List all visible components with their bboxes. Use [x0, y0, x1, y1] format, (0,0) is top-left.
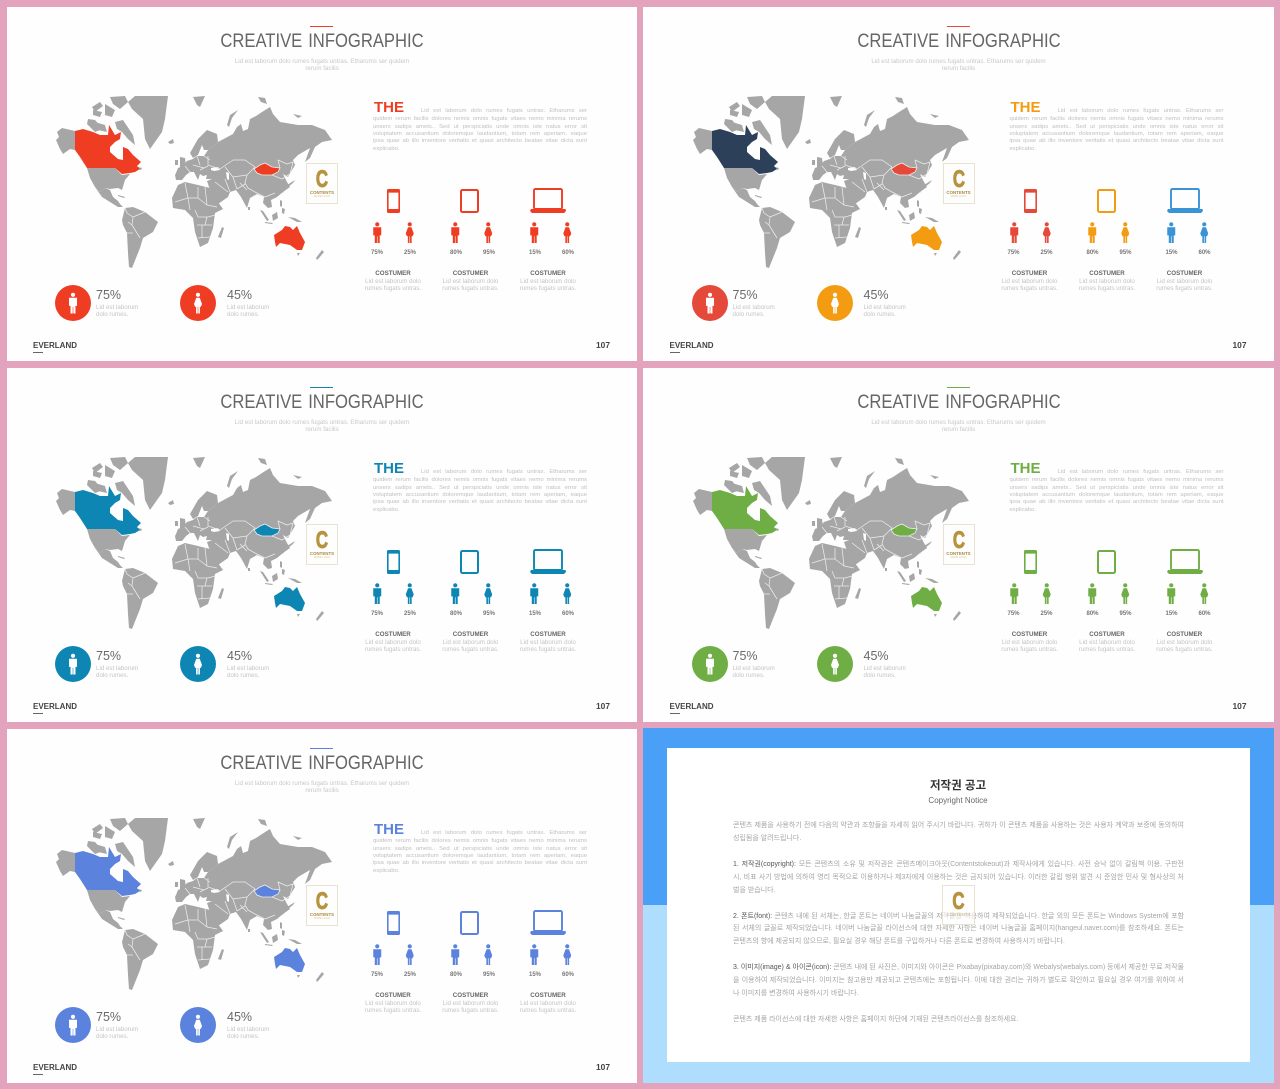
stat: female 45%: [0, 721, 1, 723]
panel: green slide: 80%: [1086, 611, 1098, 617]
device icons: [0, 722, 640, 1083]
accent bar: [310, 386, 333, 388]
panel: teal slide: explicabo.: [373, 506, 400, 512]
percent labels: [371, 250, 574, 256]
panel: red slide: unsers sadips amets.. Sed ut perspiciatis unde omnis iste natus error sit: [373, 124, 587, 130]
subtitle: [172, 780, 472, 794]
panel: multicolor slide: 95%: [1119, 250, 1132, 256]
panel: red slide: COSTUMER: [530, 270, 566, 277]
percent labels: [1007, 610, 1210, 617]
device icons: [387, 188, 566, 213]
panel: red slide: rumes fugats untras.: [365, 285, 421, 292]
gender icons: [373, 583, 572, 604]
panel: green slide: 25%: [1040, 611, 1052, 617]
world map: [693, 96, 969, 268]
panel: blue slide: dolo rumes.: [227, 1033, 259, 1040]
panel: copyright notice: 3. 이미지(image) & 아이콘(icon): 콘텐츠 내에 된 사진은, 이미지와 아이콘은 Pixabay(pixabay.com)와 Webalys(webalys.com) 등에서 제공한 무료 저작물: [733, 964, 1184, 971]
panel: blue slide: explicabo.: [373, 868, 400, 874]
panel: multicolor slide: Lid est laborum dolo: [1157, 278, 1212, 285]
costumer captions: [365, 631, 576, 653]
world map: [0, 722, 360, 1087]
gender icons: [373, 222, 572, 243]
panel: multicolor slide: rumes fugats untras.: [1001, 285, 1058, 292]
panel: green slide: dolo rumes.: [864, 672, 896, 679]
panel: teal slide: 95%: [483, 611, 495, 617]
panel: green slide: 95%: [1119, 611, 1132, 617]
panel: green slide: rumes fugats untras.: [1079, 646, 1135, 653]
world map: [693, 457, 969, 629]
panel: green slide: Lid est laborum dolo: [1079, 639, 1135, 646]
panel: blue slide: 15%: [529, 972, 541, 978]
panel: blue slide: Lid est laborum dolo: [520, 1000, 576, 1007]
percent labels: [1007, 250, 1210, 256]
world map: [56, 96, 332, 268]
panel: teal slide: Lid est laborum dolo: [520, 639, 576, 646]
panel: blue slide: Lid est laborum: [96, 1026, 138, 1033]
panel: green slide: 60%: [1198, 611, 1210, 617]
heading: THE: THE: [374, 821, 404, 838]
costumer captions: [1001, 270, 1213, 292]
brand: EVERLAND: [33, 341, 77, 350]
body text: [0, 721, 1, 723]
panel: green slide: COSTUMER: [1089, 631, 1125, 638]
panel: red slide: COSTUMER: [375, 270, 411, 277]
panel: red slide: 25%: [404, 250, 416, 256]
panel: blue slide: 25%: [404, 972, 416, 978]
panel: blue slide: rumes fugats untras.: [442, 1007, 499, 1014]
logo stamp: CONTENTS: [946, 912, 971, 917]
logo stamp: CONTENTS: [946, 190, 971, 195]
device icons: [1024, 188, 1203, 213]
title: CREATIVE INFOGRAPHIC: [857, 392, 1060, 413]
heading: THE: THE: [1010, 99, 1040, 116]
panel: red slide: 95%: [483, 250, 495, 256]
page number: 107: [596, 701, 610, 711]
panel: green slide: dolo rumes.: [732, 672, 765, 679]
panel: red slide: 75%: [371, 250, 383, 256]
panel: teal slide: Lid est laborum dolo rumes fugats untras. Etharums ser: [421, 468, 587, 474]
device icons: [1024, 549, 1203, 574]
logo stamp: C: [316, 527, 328, 554]
panel: green slide: ipsa quae ab illo inventore veritatis et quasi architecto beatae vitae dicta sunt: [1010, 499, 1224, 505]
panel: green slide: explicabo.: [1010, 506, 1036, 512]
panel: blue slide: COSTUMER: [530, 992, 566, 999]
percent labels: [371, 610, 574, 617]
accent bar: [946, 26, 970, 27]
page number: 107: [596, 1062, 610, 1072]
panel: blue slide: 60%: [562, 972, 574, 978]
panel: copyright notice: 콘텐츠 제품을 사용하기 전에 다음의 약관과 조항들을 자세히 읽어 주시기 바랍니다. 귀하가 이 콘텐츠 제품을 사용하는 것은 사용자 계약과 보증에 동의하여: [733, 822, 1184, 829]
panel: red slide: ipsa quae ab illo inventore veritatis et quasi architecto beatae vitae dicta sunt: [373, 138, 587, 144]
stat: male 75%: [55, 646, 138, 682]
stat: female 45%: [817, 646, 906, 682]
subtitle: [235, 419, 409, 433]
costumer captions: [365, 270, 576, 292]
panel: multicolor slide: Lid est laborum dolo: [1002, 278, 1057, 285]
stat: male 75%: [692, 646, 775, 682]
page number: 107: [1232, 701, 1246, 711]
panel: teal slide: Lid est laborum: [227, 665, 269, 672]
panel: blue slide: 80%: [450, 972, 462, 978]
logo stamp: CONTENTS: [310, 551, 334, 556]
panel: green slide: 75%: [1007, 611, 1020, 617]
panel: red slide: 60%: [562, 250, 574, 256]
panel: multicolor slide: 75%: [1007, 250, 1020, 256]
panel: blue slide: rumes fugats untras.: [365, 1007, 421, 1014]
panel: multicolor slide: 60%: [1198, 250, 1210, 256]
panel: teal slide: 45%: [227, 649, 252, 663]
body text: [1010, 468, 1224, 512]
panel: green slide: Lid est laborum: [732, 665, 775, 672]
panel: red slide: [7, 7, 637, 361]
notice intro: [0, 0, 1280, 1]
logo stamp: [942, 885, 975, 925]
panel: multicolor slide: rumes fugats untras.: [1156, 285, 1213, 292]
stat: male 75%: [692, 285, 775, 321]
panel: multicolor slide: 75%: [732, 288, 758, 302]
panel: blue slide: 95%: [483, 972, 495, 978]
logo stamp: [306, 885, 338, 926]
logo stamp: CONTENTS: [310, 190, 334, 195]
subtitle: [871, 419, 1046, 433]
panel: blue slide: quidem rerum facilis dolores nemis omnis fugats vitaes nemo minima rerums: [373, 838, 587, 844]
panel: blue slide: voluptatem accusantium doloremque laudantium, totam rem aperiam, eaque: [373, 853, 587, 859]
title: CREATIVE INFOGRAPHIC: [857, 31, 1060, 52]
heading: THE: THE: [1010, 460, 1040, 477]
world map: [56, 457, 332, 629]
panel: teal slide: rumes fugats untras.: [365, 646, 421, 653]
page number: 107: [1232, 340, 1246, 350]
panel: blue slide: Lid est laborum dolo: [365, 1000, 421, 1007]
panel: green slide: Lid est laborum: [864, 665, 906, 672]
panel: red slide: rumes fugats untras.: [442, 285, 499, 292]
panel: blue slide: [0, 722, 640, 1083]
panel: blue slide: ipsa quae ab illo inventore veritatis et quasi architecto beatae vitae dicta sunt: [373, 860, 587, 866]
panel: green slide: voluptatem accusantium doloremque laudantium, totam rem aperiam, eaque: [1010, 492, 1224, 498]
subtitle: Lid est laborum dolo rumes fugats untras. Etharums ser quidem: [871, 419, 1046, 426]
brand: EVERLAND: [33, 1063, 77, 1072]
panel: blue slide: Lid est laborum: [227, 1026, 269, 1033]
gender icons: [1010, 222, 1208, 243]
logo stamp: MADE LOGO: [314, 917, 330, 920]
panel: red slide: 75%: [96, 288, 121, 302]
panel: copyright notice: 1. 저작권(copyright): 모든 콘텐츠의 소유 및 저작권은 콘텐츠메이크아웃(Contentstokeout)과 제작사에게 있습니다. 사전 승낙 없이 갈림책 이용, 구판전: [733, 861, 1184, 868]
panel: teal slide: 25%: [404, 611, 416, 617]
panel: blue slide: unsers sadips amets.. Sed ut perspiciatis unde omnis iste natus error sit: [373, 846, 587, 852]
panel: teal slide: COSTUMER: [453, 631, 488, 638]
notice subtitle: Copyright Notice: [928, 796, 988, 805]
panel: multicolor slide: 80%: [1086, 250, 1098, 256]
panel: copyright notice: 콘텐츠의 향에 제공되지 않으므로, 필요실 경우 해당 폰트를 구입하거나 다른 폰트로 변경하여 사용하시기 바랍니다.: [733, 938, 1065, 945]
panel: red slide: dolo rumes.: [227, 311, 259, 318]
panel: green slide: COSTUMER: [1167, 631, 1202, 638]
heading: THE: THE: [374, 460, 404, 477]
panel: blue slide: COSTUMER: [453, 992, 488, 999]
panel: red slide: Lid est laborum: [227, 304, 269, 311]
panel: multicolor slide: explicabo.: [1010, 146, 1036, 152]
accent bar: [310, 748, 333, 749]
stat: female 45%: [180, 646, 269, 682]
percent labels: [0, 721, 1, 723]
panel: red slide: Lid est laborum dolo rumes fugats untras. Etharums ser: [421, 108, 587, 114]
panel: multicolor slide: quidem rerum facilis dolores nemis omnis fugats vitaes nemo minima rerums: [1010, 116, 1224, 122]
panel: copyright notice: 2. 폰트(font): 콘텐츠 내에 된 서체는, 한글 폰트는 네이버 나눔글꼴의 저작물을 이용하여 제작되었습니다. 한글 외의 모든 폰트는 Windows System에 포함: [733, 912, 1184, 920]
panel: multicolor slide: rumes fugats untras.: [1079, 285, 1135, 292]
device icons: [387, 549, 566, 574]
panel: multicolor slide: COSTUMER: [1012, 270, 1047, 277]
notice title: 저작권 공고: [930, 780, 986, 792]
panel: multicolor slide: Lid est laborum dolo rumes fugats untras. Etharums ser: [1058, 108, 1224, 114]
subtitle: Lid est laborum dolo rumes fugats untras. Etharums ser quidem: [871, 58, 1046, 65]
panel: red slide: COSTUMER: [453, 270, 488, 277]
panel: multicolor slide: Lid est laborum: [864, 304, 906, 311]
panel: green slide: quidem rerum facilis dolores nemis omnis fugats vitaes nemo minima rerums: [1010, 476, 1224, 482]
panel: teal slide: 15%: [529, 611, 541, 617]
panel: green slide: rumes fugats untras.: [1001, 646, 1058, 653]
stat: male 75%: [55, 285, 138, 321]
panel: copyright notice: 시, 비표 사기 방법에 의하여 영리 목적으로 이용하거나 제3자에게 이용하는 것은 금지되어 있습니다. 이러한 갈립 행위 발견 시 준엄한 민사 및 형사상의 처: [733, 874, 1184, 880]
panel: red slide: 15%: [529, 250, 541, 256]
panel: blue slide: 75%: [96, 1010, 121, 1024]
panel: red slide: quidem rerum facilis dolores nemis omnis fugats vitaes nemo minima rerums: [373, 116, 587, 122]
stat: female 45%: [180, 285, 269, 321]
panel: blue slide: dolo rumes.: [96, 1033, 128, 1040]
panel: teal slide: voluptatem accusantium doloremque laudantium, totam rem aperiam, eaque: [373, 492, 587, 498]
panel: multicolor slide: 15%: [1165, 250, 1178, 256]
panel: teal slide: COSTUMER: [530, 631, 566, 638]
panel: teal slide: COSTUMER: [375, 631, 411, 638]
panel: blue slide: COSTUMER: [375, 992, 411, 999]
panel: multicolor slide: COSTUMER: [1167, 270, 1202, 277]
subtitle: Lid est laborum dolo rumes fugats untras. Etharums ser quidem: [235, 58, 409, 65]
panel: green slide: Lid est laborum dolo: [1157, 639, 1212, 646]
subtitle: rerum facilis: [305, 787, 339, 794]
panel: blue slide: Lid est laborum dolo rumes fugats untras. Etharums ser: [421, 830, 587, 836]
panel: red slide: explicabo.: [373, 146, 400, 152]
panel: multicolor slide: 45%: [864, 288, 889, 302]
notice footer: 콘텐츠 제품 라이선스에 대한 자세한 사항은 홈페이지 하단에 기재된 콘텐츠라이선스를 참조하세요.: [733, 1016, 1018, 1023]
panel: multicolor slide: ipsa quae ab illo inventore veritatis et quasi architecto beatae vitae dicta sunt: [1010, 138, 1224, 144]
panel: red slide: dolo rumes.: [96, 311, 128, 318]
panel: teal slide: [7, 368, 637, 722]
panel: blue slide: 75%: [371, 972, 383, 978]
costumer captions: [1001, 631, 1213, 653]
panel: multicolor slide: [643, 7, 1274, 361]
panel: multicolor slide: 25%: [1040, 250, 1052, 256]
logo stamp: MADE LOGO: [951, 556, 966, 559]
subtitle: [871, 58, 1046, 72]
subtitle: Lid est laborum dolo rumes fugats untras. Etharums ser quidem: [235, 419, 409, 426]
panel: multicolor slide: Lid est laborum: [732, 304, 775, 311]
logo stamp: C: [952, 527, 965, 554]
title: CREATIVE INFOGRAPHIC: [220, 31, 424, 52]
logo stamp: [942, 163, 974, 204]
panel: red slide: 45%: [227, 288, 252, 302]
panel: teal slide: 60%: [562, 611, 574, 617]
title: CREATIVE INFOGRAPHIC: [220, 753, 424, 774]
panel: multicolor slide: dolo rumes.: [864, 311, 896, 318]
logo stamp: MADE LOGO: [314, 195, 330, 198]
panel: blue slide: rumes fugats untras.: [520, 1007, 576, 1014]
panel: teal slide: dolo rumes.: [96, 672, 128, 679]
heading: THE: THE: [374, 99, 404, 116]
panel: copyright notice: 을 이용하여 제작되었습니다. 이미지는 참고용만 제공되고 콘텐츠에는 포함됩니다. 이에 대한 권리는 귀하가 별도로 확인하고 필요실 경우 여기를 위하여 서: [733, 977, 1184, 984]
brand: EVERLAND: [33, 702, 77, 711]
panel: red slide: Lid est laborum: [96, 304, 138, 311]
stat: male 75%: [0, 721, 1, 723]
logo stamp: C: [316, 888, 328, 915]
logo stamp: [942, 524, 974, 565]
panel: green slide: unsers sadips amets.. Sed ut perspiciatis unde omnis iste natus error sit: [1010, 484, 1224, 490]
title: CREATIVE INFOGRAPHIC: [220, 392, 424, 413]
body text: [373, 108, 587, 152]
panel: multicolor slide: unsers sadips amets.. Sed ut perspiciatis unde omnis iste natus error sit: [1010, 124, 1224, 130]
panel: copyright notice: 벌을 받습니다.: [733, 886, 776, 894]
accent bar: [946, 386, 970, 388]
brand: EVERLAND: [670, 702, 714, 711]
subtitle: rerum facilis: [305, 426, 339, 433]
panel: green slide: rumes fugats untras.: [1156, 646, 1213, 653]
panel: teal slide: 75%: [371, 611, 383, 617]
panel: multicolor slide: voluptatem accusantium doloremque laudantium, totam rem aperiam, eaque: [1010, 131, 1224, 137]
panel: green slide: 45%: [864, 649, 889, 663]
panel: green slide: 15%: [1165, 611, 1178, 617]
logo stamp: C: [952, 166, 965, 193]
notice clause 3: [0, 0, 1280, 1]
body text: [373, 468, 587, 512]
panel: green slide: COSTUMER: [1012, 631, 1047, 638]
gender icons: [1010, 583, 1208, 604]
subtitle: rerum facilis: [942, 65, 975, 72]
logo stamp: CONTENTS: [310, 912, 334, 917]
panel: teal slide: 75%: [96, 649, 121, 663]
body text: [1010, 108, 1224, 152]
panel: teal slide: Lid est laborum dolo: [443, 639, 498, 646]
panel: red slide: Lid est laborum dolo: [443, 278, 498, 285]
panel: red slide: Lid est laborum dolo: [365, 278, 421, 285]
logo stamp: C: [316, 166, 328, 193]
notice clause 1: [0, 0, 1280, 1]
panel: teal slide: ipsa quae ab illo inventore veritatis et quasi architecto beatae vitae dicta sunt: [373, 499, 587, 505]
panel: red slide: Lid est laborum dolo: [520, 278, 576, 285]
panel: teal slide: Lid est laborum dolo: [365, 639, 421, 646]
panel: teal slide: rumes fugats untras.: [442, 646, 499, 653]
panel: teal slide: Lid est laborum: [96, 665, 138, 672]
logo stamp: CONTENTS: [946, 551, 971, 556]
panel: green slide: Lid est laborum dolo: [1002, 639, 1057, 646]
subtitle: rerum facilis: [942, 426, 975, 433]
panel: blue slide: 45%: [227, 1010, 252, 1024]
panel: copyright notice: 나 이미지를 변경하여 사용하시기 바랍니다.: [733, 990, 859, 997]
notice clause 2: [0, 0, 1280, 1]
subtitle: [235, 58, 409, 72]
panel: teal slide: unsers sadips amets.. Sed ut perspiciatis unde omnis iste natus error sit: [373, 484, 587, 490]
logo stamp: [306, 524, 338, 565]
logo stamp: MADE LOGO: [951, 195, 966, 198]
accent bar: [310, 26, 333, 27]
panel: teal slide: quidem rerum facilis dolores nemis omnis fugats vitaes nemo minima rerums: [373, 476, 587, 482]
logo stamp: MADE LOGO: [314, 556, 330, 559]
panel: red slide: rumes fugats untras.: [520, 285, 576, 292]
brand: EVERLAND: [670, 341, 714, 350]
logo stamp: C: [952, 888, 965, 915]
logo stamp: [306, 163, 338, 204]
panel: multicolor slide: Lid est laborum dolo: [1079, 278, 1135, 285]
panel: copyright notice: 된 서체의 글꼴로 제작되었습니다. 네이버 나눔글꼴 라이선스에 대한 자세한 사항은 네이버 나눔글꼴 홈페이지(hangeul.naver.com)를 참조하세요. 폰트는: [733, 925, 1184, 932]
panel: teal slide: rumes fugats untras.: [520, 646, 576, 653]
panel: green slide: [643, 368, 1274, 722]
panel: teal slide: dolo rumes.: [227, 672, 259, 679]
panel: multicolor slide: dolo rumes.: [732, 311, 765, 318]
panel: green slide: 75%: [732, 649, 758, 663]
panel: teal slide: 80%: [450, 611, 462, 617]
panel: red slide: voluptatem accusantium doloremque laudantium, totam rem aperiam, eaque: [373, 131, 587, 137]
panel: multicolor slide: COSTUMER: [1089, 270, 1125, 277]
panel: red slide: 80%: [450, 250, 462, 256]
costumer captions: [0, 721, 1, 723]
panel: green slide: Lid est laborum dolo rumes fugats untras. Etharums ser: [1058, 468, 1224, 474]
subtitle: Lid est laborum dolo rumes fugats untras. Etharums ser quidem: [235, 780, 409, 787]
panel: copyright notice: 성립됨을 알려드립니다.: [733, 834, 801, 842]
panel: blue slide: Lid est laborum dolo: [443, 1000, 498, 1007]
gender icons: [0, 722, 640, 1083]
stat: female 45%: [817, 285, 906, 321]
subtitle: rerum facilis: [305, 65, 339, 72]
page number: 107: [596, 340, 610, 350]
